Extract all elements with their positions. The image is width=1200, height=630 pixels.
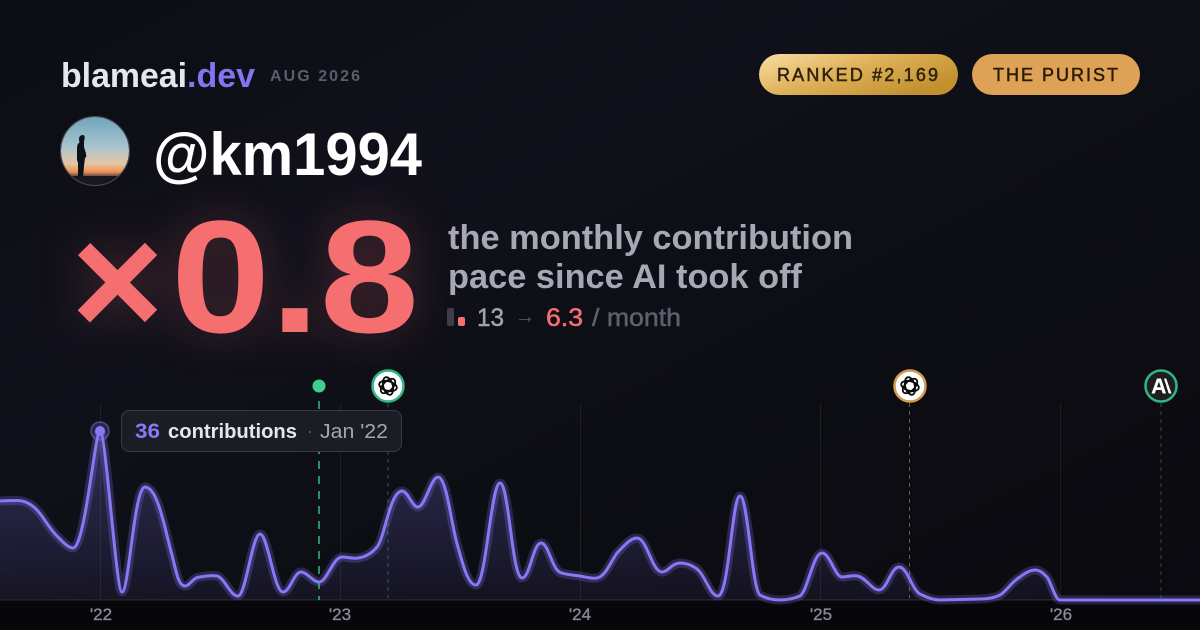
hero multiplier: 0.8	[171, 187, 419, 366]
hero multiplier	[71, 187, 419, 370]
badge: rank	[759, 54, 958, 95]
baseline	[0, 599, 1200, 600]
pace comparison: 6.3	[546, 304, 583, 332]
axis labels: '26	[1050, 605, 1072, 624]
trend line glow	[0, 431, 1200, 600]
marker line: third model	[1160, 403, 1162, 598]
marker line: green dashed	[318, 401, 320, 600]
tooltip: contributions	[168, 421, 297, 443]
year grid	[100, 403, 1060, 600]
header: brand: blameai	[61, 57, 187, 95]
description: the monthly contribution	[448, 219, 853, 257]
badge: the purist: THE PURIST	[993, 65, 1118, 85]
pace comparison: 13	[477, 304, 504, 332]
trend line	[0, 431, 1200, 600]
area	[0, 431, 1200, 600]
tooltip	[122, 410, 402, 452]
marker line: first model	[387, 403, 389, 598]
chart	[0, 370, 1200, 624]
date label: AUG 2026	[270, 68, 360, 85]
peak marker	[91, 422, 109, 440]
pace comparison: / month	[592, 304, 681, 332]
tooltip: ·	[307, 421, 313, 441]
axis labels: '23	[329, 605, 351, 624]
axis labels	[90, 605, 1072, 624]
header: brand: .dev	[187, 57, 255, 95]
marker dot: green	[312, 380, 326, 392]
icon: anthropic	[1146, 370, 1176, 402]
pace comparison	[447, 304, 681, 332]
hero multiplier: ×	[71, 192, 164, 370]
axis labels: '25	[810, 605, 832, 624]
icon: mini bars	[447, 308, 465, 326]
username: @km1994	[153, 121, 423, 188]
icon: chatgpt green	[372, 370, 404, 402]
pace comparison: →	[515, 306, 535, 328]
description	[448, 219, 853, 296]
axis labels: '24	[569, 605, 591, 624]
badge: the purist	[972, 54, 1140, 95]
tooltip: Jan '22	[320, 421, 388, 443]
description: pace since AI took off	[448, 258, 803, 296]
header: brand	[61, 57, 255, 95]
tooltip: 36	[135, 420, 160, 443]
axis labels: '22	[90, 605, 112, 624]
marker line: second model	[908, 403, 910, 598]
icon: chatgpt orange	[894, 370, 926, 402]
badge: rank: RANKED #2,169	[777, 65, 938, 85]
avatar	[60, 116, 130, 186]
